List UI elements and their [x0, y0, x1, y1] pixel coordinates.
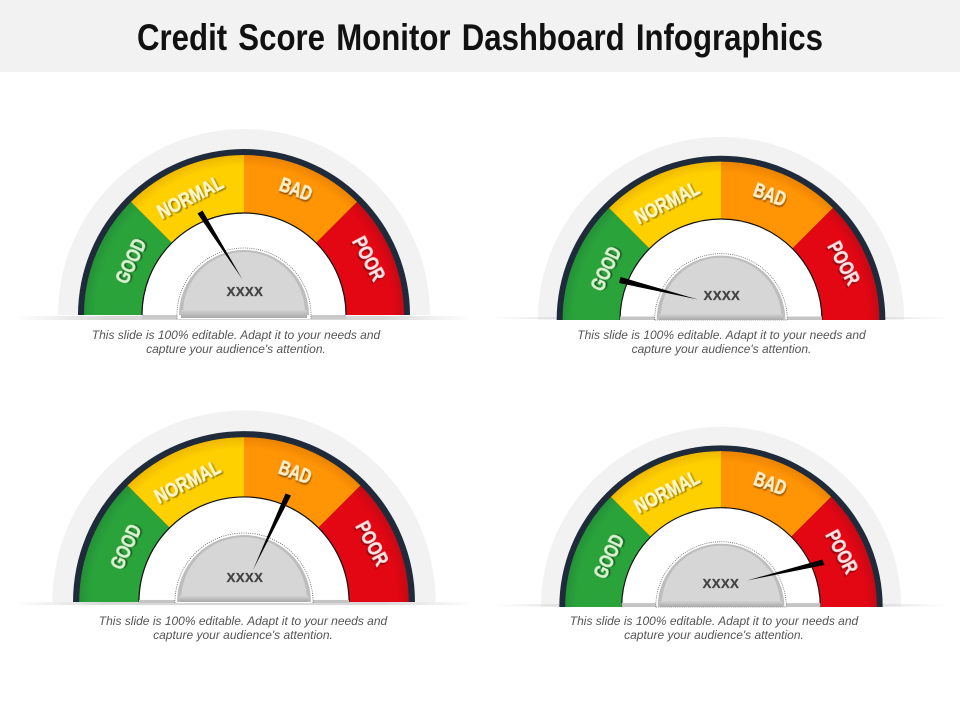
- label: GOOD: GOOD: [107, 521, 146, 573]
- label: BAD: BAD: [276, 457, 314, 489]
- label: BAD: BAD: [276, 174, 315, 206]
- caption: capture your audience's attention.: [146, 342, 326, 356]
- needle: [253, 494, 291, 570]
- value: XXXX: [704, 288, 740, 303]
- panel: gauge bottom right: [493, 427, 949, 642]
- caption: capture your audience's attention.: [624, 628, 804, 642]
- caption: This slide is 100% editable. Adapt it to your needs and: [577, 328, 866, 342]
- label: POOR: POOR: [347, 233, 389, 285]
- title: Credit Score Monitor Dashboard Infographics: [137, 17, 823, 58]
- label: POOR: POOR: [823, 238, 864, 289]
- value: XXXX: [227, 284, 263, 299]
- dial: [491, 137, 951, 320]
- dial: [15, 129, 473, 320]
- value: XXXX: [703, 576, 739, 591]
- caption: This slide is 100% editable. Adapt it to your needs and: [92, 328, 381, 342]
- needle: [747, 560, 824, 580]
- label: NORMAL: NORMAL: [151, 457, 224, 508]
- caption: capture your audience's attention.: [632, 342, 811, 356]
- panel: gauge bottom left: [13, 410, 475, 642]
- panel: gauge top left: [15, 129, 473, 356]
- label: GOOD: GOOD: [112, 236, 151, 287]
- label: BAD: BAD: [751, 468, 789, 500]
- value: XXXX: [227, 570, 263, 585]
- header band: [0, 0, 960, 72]
- dial: [493, 427, 949, 607]
- label: GOOD: GOOD: [587, 244, 626, 295]
- caption: This slide is 100% editable. Adapt it to your needs and: [570, 614, 859, 628]
- needle: [198, 210, 242, 280]
- label: BAD: BAD: [750, 179, 789, 211]
- dial: [13, 410, 475, 605]
- label: NORMAL: NORMAL: [631, 467, 703, 518]
- caption: capture your audience's attention.: [153, 628, 333, 642]
- label: NORMAL: NORMAL: [631, 178, 703, 229]
- panel: gauge top right: [491, 137, 951, 356]
- label: POOR: POOR: [351, 518, 392, 570]
- caption: This slide is 100% editable. Adapt it to your needs and: [99, 614, 388, 628]
- label: GOOD: GOOD: [590, 531, 629, 582]
- label: POOR: POOR: [821, 527, 862, 578]
- label: NORMAL: NORMAL: [154, 172, 227, 224]
- needle: [619, 277, 698, 300]
